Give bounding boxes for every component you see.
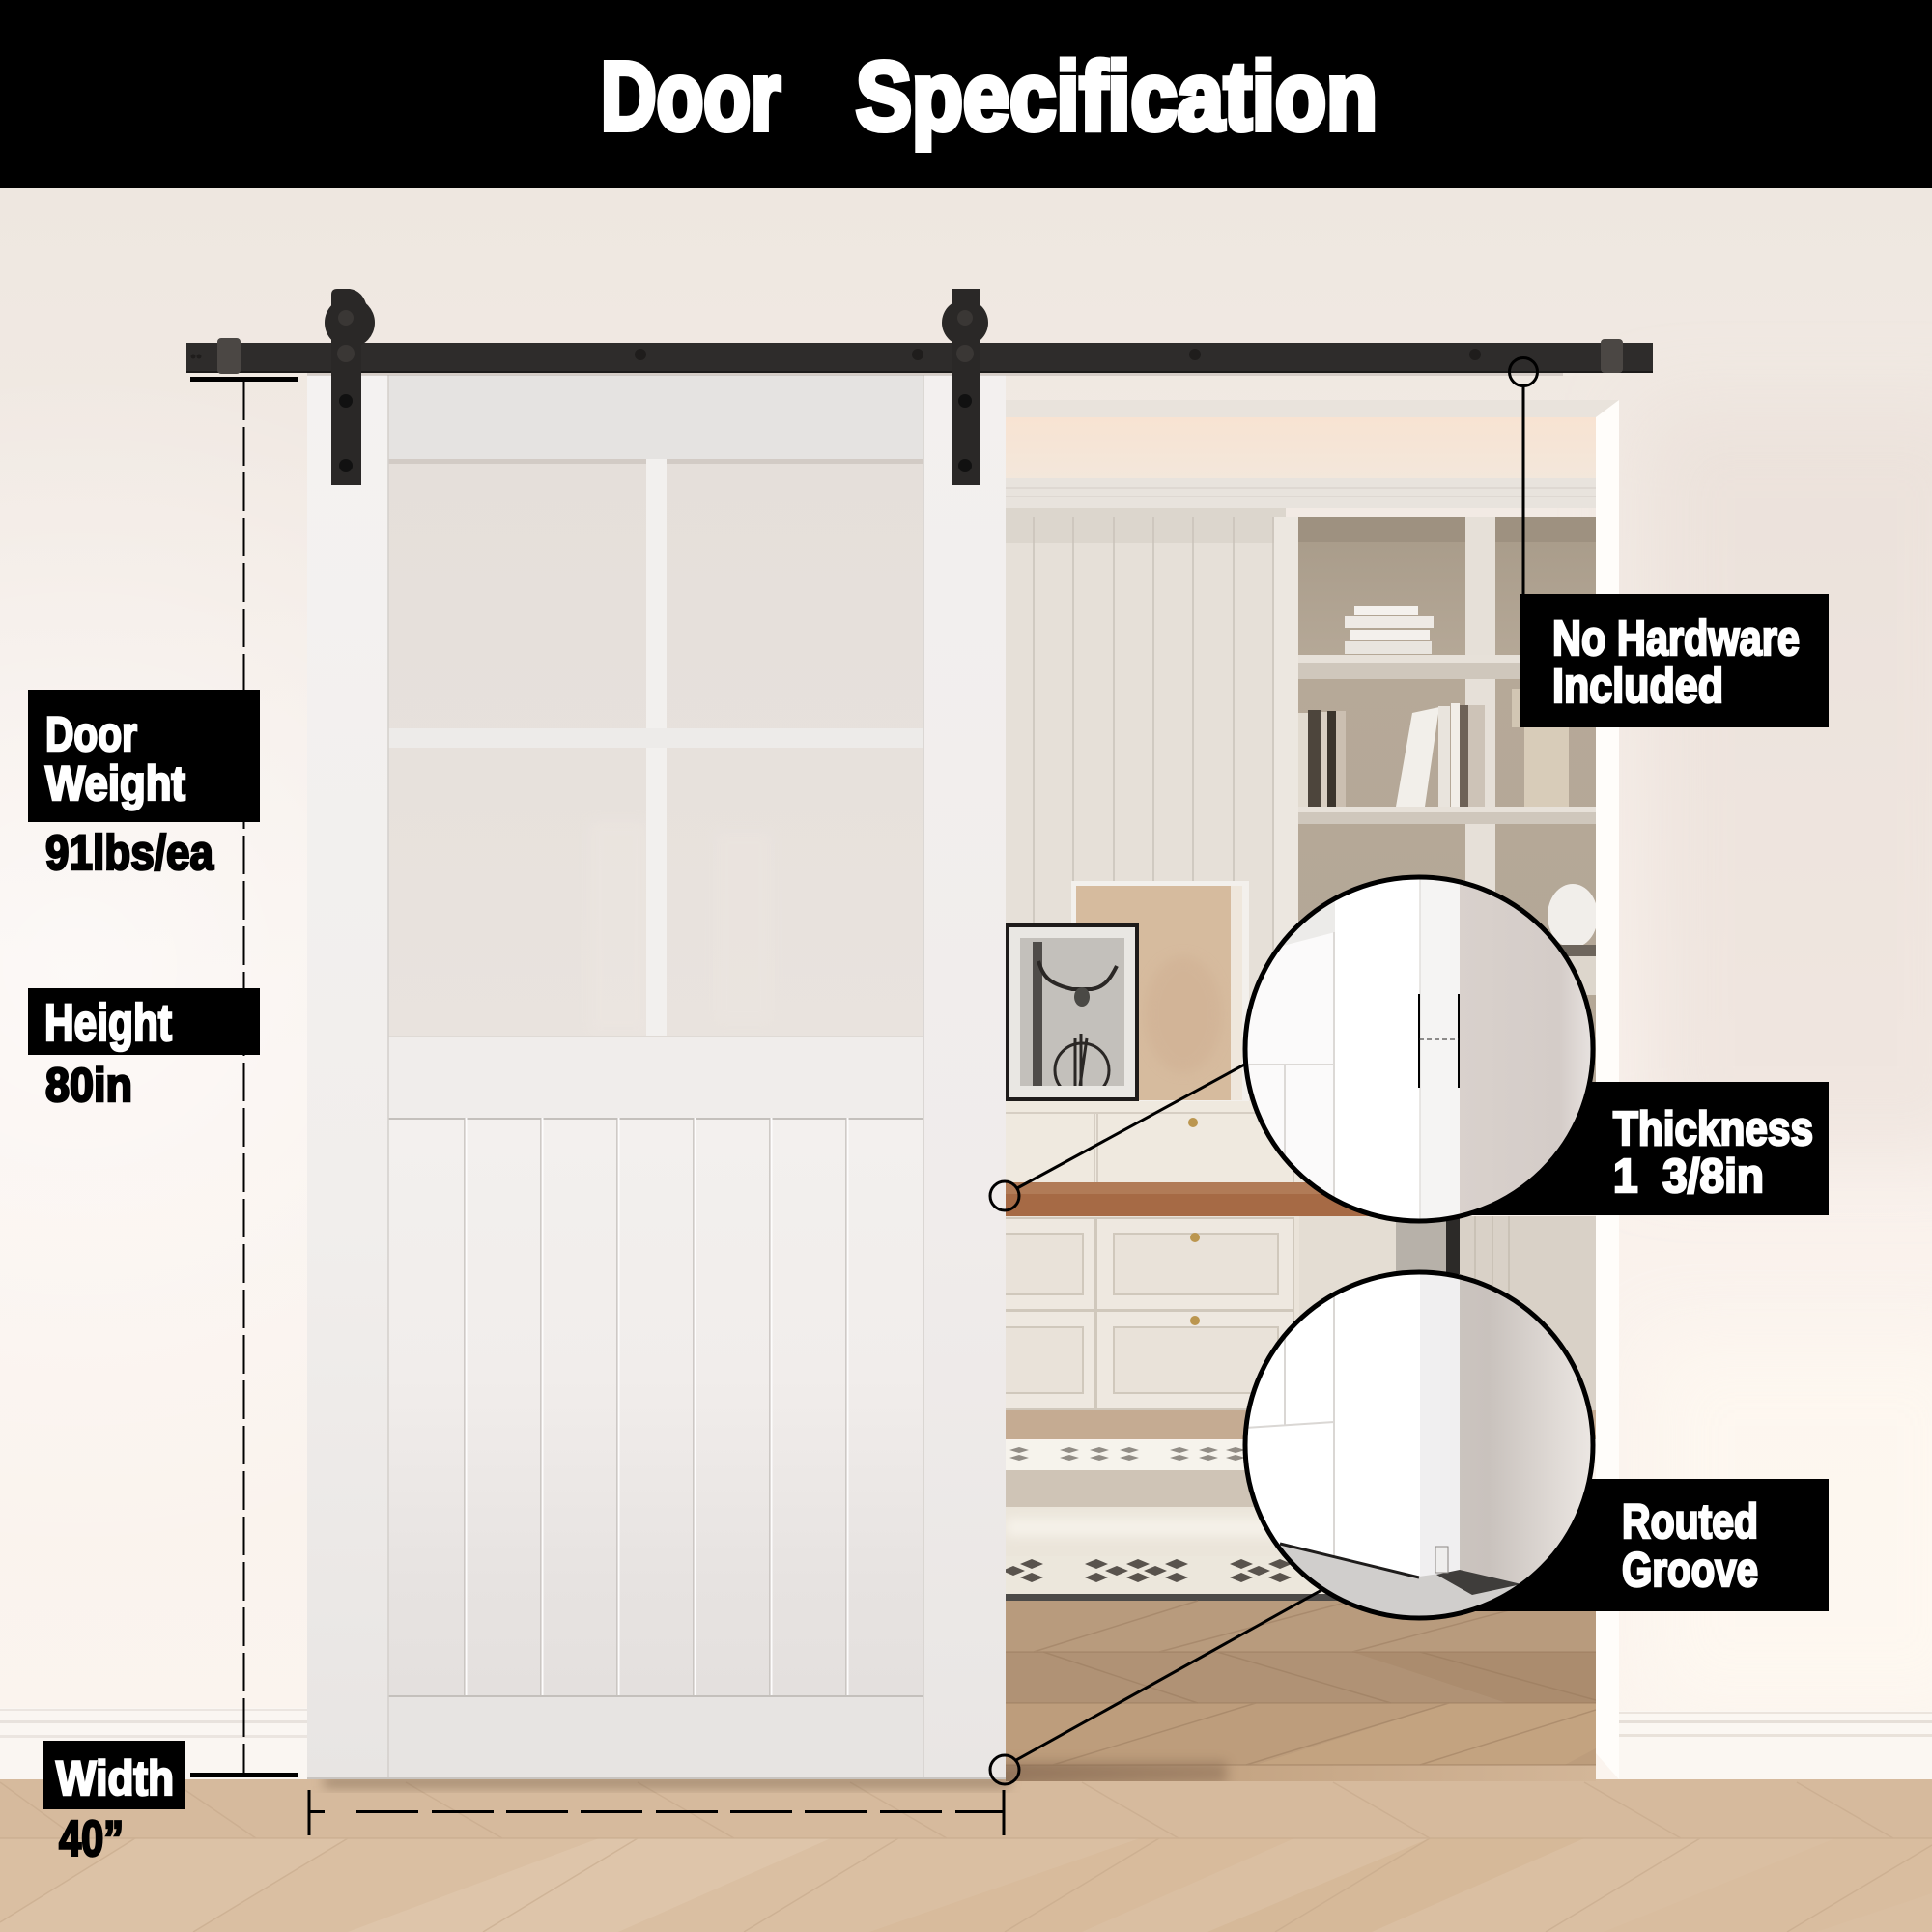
- label: height: [28, 988, 260, 1055]
- width dimension line: [307, 1790, 1005, 1835]
- herringbone lines in room: [1006, 1601, 1596, 1765]
- baseboards: [0, 1708, 1932, 1780]
- title banner: Door: [601, 43, 781, 151]
- barn door: [307, 375, 1006, 1779]
- sculpture: [1512, 689, 1569, 807]
- title banner: Specification: [856, 43, 1378, 151]
- label: thickness: 1 3/8in: [1613, 1151, 1764, 1203]
- vase: [1548, 884, 1598, 956]
- leader lines and markers: [990, 357, 1538, 1784]
- door shadow on floor: [324, 1777, 1009, 1787]
- label: routed groove: Routed: [1622, 1494, 1758, 1548]
- label: routed groove: [1468, 1479, 1829, 1611]
- label: width: [43, 1741, 185, 1809]
- thickness measure mark: [1419, 994, 1459, 1088]
- rug large diamonds: [1002, 1559, 1292, 1582]
- rug small diamonds: [1009, 1447, 1245, 1461]
- detail circle: routed groove: [1245, 1271, 1593, 1619]
- doorway frame: [1006, 400, 1619, 1779]
- paneled back wall: [1006, 508, 1286, 1107]
- detail circle: door thickness: [1245, 877, 1593, 1221]
- framed bicycle photograph: [1006, 923, 1139, 1101]
- v-groove planks: [388, 1118, 923, 1696]
- groove notch: [1435, 1547, 1448, 1573]
- left hanger: [325, 289, 375, 485]
- label: no hardware included: [1520, 594, 1829, 727]
- label: thickness: Thickness: [1613, 1103, 1813, 1155]
- label: no hardware included: Included: [1552, 658, 1723, 713]
- bottom rail: [388, 1695, 923, 1777]
- value: height: 80in: [45, 1060, 132, 1112]
- value: door weight: 91lbs/ea: [45, 825, 214, 880]
- lower cabinets: [995, 1216, 1596, 1414]
- room floor: [1006, 1410, 1596, 1781]
- label: thickness: [1468, 1082, 1829, 1215]
- floor planks lower row: [0, 1838, 1932, 1932]
- sliding track rail: [186, 338, 1653, 376]
- bookcase: [1274, 517, 1596, 1106]
- track bolts: [191, 349, 1481, 360]
- cabinet upper: [1006, 1101, 1305, 1182]
- height dimension line: [190, 377, 298, 1777]
- label: width: Width: [56, 1751, 174, 1805]
- floor under door: [1279, 1544, 1507, 1615]
- mid rail: [388, 1036, 923, 1118]
- top rail: [388, 375, 923, 459]
- label: door weight: [28, 690, 260, 822]
- label: no hardware included: No Hardware: [1552, 611, 1800, 666]
- doorway room interior: [995, 400, 1598, 1783]
- label: height: Height: [44, 994, 172, 1052]
- vertical muntin: [646, 459, 667, 1037]
- label: door weight: Door: [45, 707, 137, 761]
- right hanger: [942, 289, 988, 485]
- floor: [0, 1779, 1932, 1932]
- horizontal muntin: [388, 728, 923, 748]
- dark floor band: [1436, 1570, 1521, 1595]
- track stoppers: [217, 338, 1623, 374]
- label: door weight: Weight: [45, 756, 185, 810]
- glass panes: [388, 459, 923, 1037]
- patterned rug: [1006, 1447, 1337, 1601]
- label: routed groove: Groove: [1622, 1543, 1758, 1597]
- books middle shelf: [1298, 703, 1485, 807]
- beige art print: [1071, 881, 1249, 1103]
- title banner: [0, 0, 1932, 188]
- value: width: 40”: [59, 1811, 124, 1867]
- wood shelf: [1006, 1182, 1392, 1216]
- books top shelf: [1345, 606, 1434, 654]
